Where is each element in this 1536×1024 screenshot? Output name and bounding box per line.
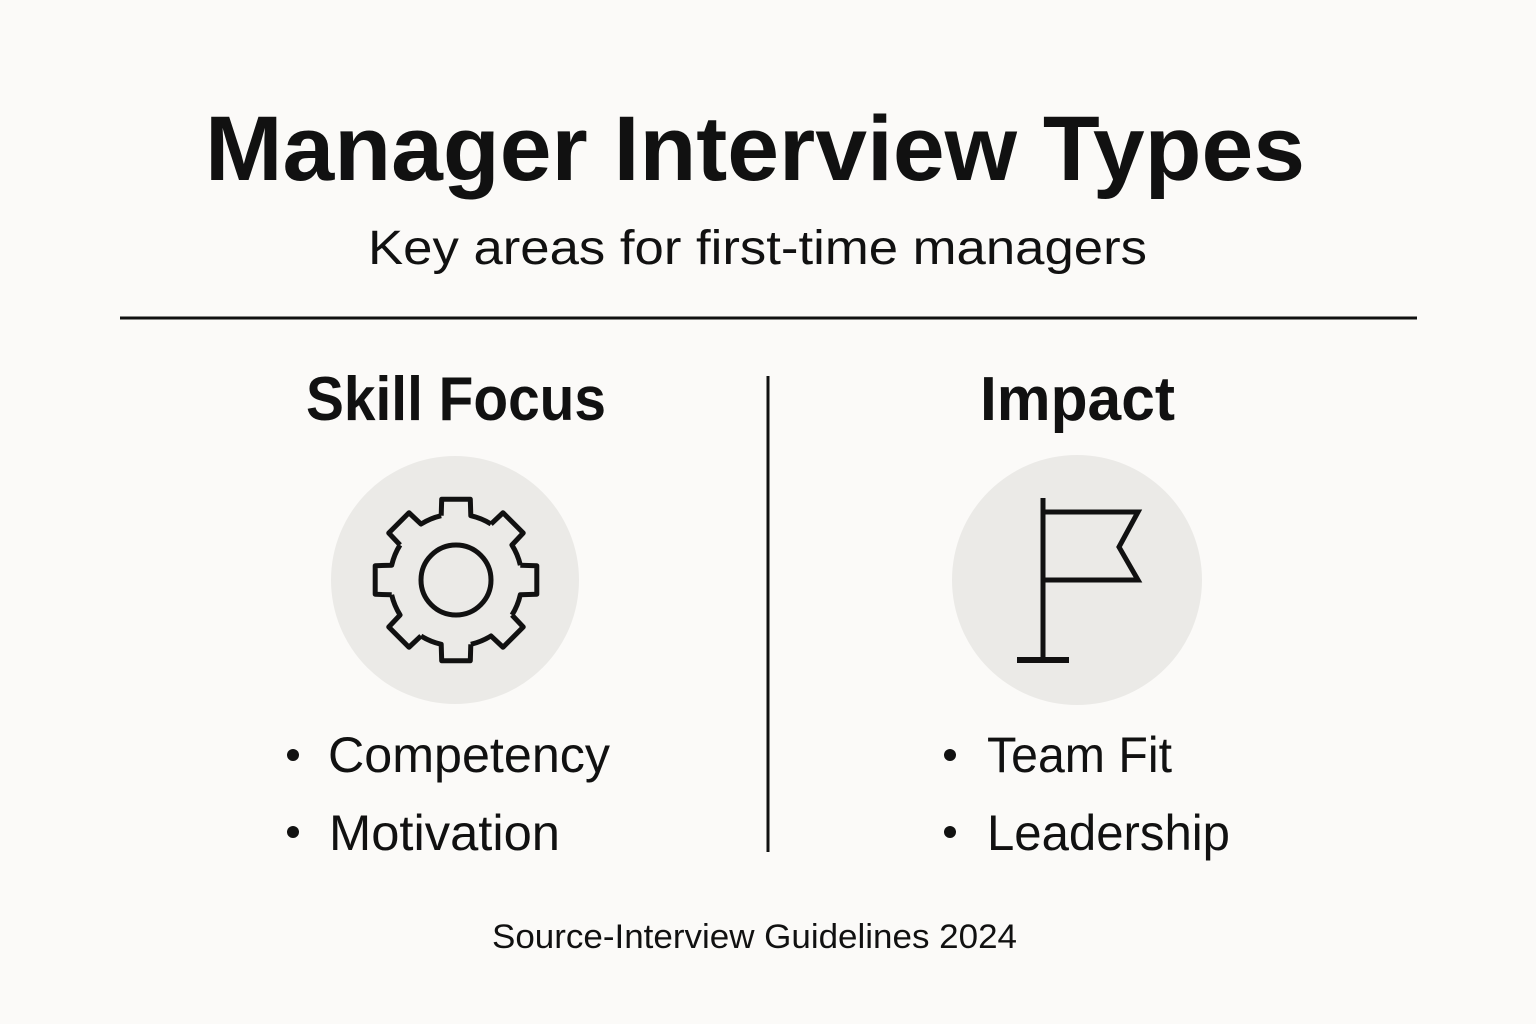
bullet list: skill focus: Motivation bbox=[329, 805, 560, 861]
heading: impact: Impact bbox=[980, 365, 1175, 434]
bullet list: impact: Leadership bbox=[987, 805, 1230, 861]
icon: flag bbox=[952, 455, 1202, 705]
bullet list: impact: Team Fit bbox=[987, 727, 1172, 783]
title: Manager Interview Types bbox=[205, 98, 1305, 200]
bullet list: skill focus: Competency bbox=[328, 727, 610, 783]
footer source: Source-Interview Guidelines 2024 bbox=[492, 918, 1017, 956]
heading: skill focus: Skill Focus bbox=[306, 365, 606, 434]
icon: gear bbox=[331, 456, 579, 704]
subtitle: Key areas for first-time managers bbox=[368, 222, 1147, 275]
panel: impact bbox=[944, 365, 1230, 861]
panel: skill focus bbox=[287, 365, 610, 861]
bullet list: skill focus bbox=[287, 727, 610, 861]
bullet list: impact bbox=[944, 727, 1230, 861]
